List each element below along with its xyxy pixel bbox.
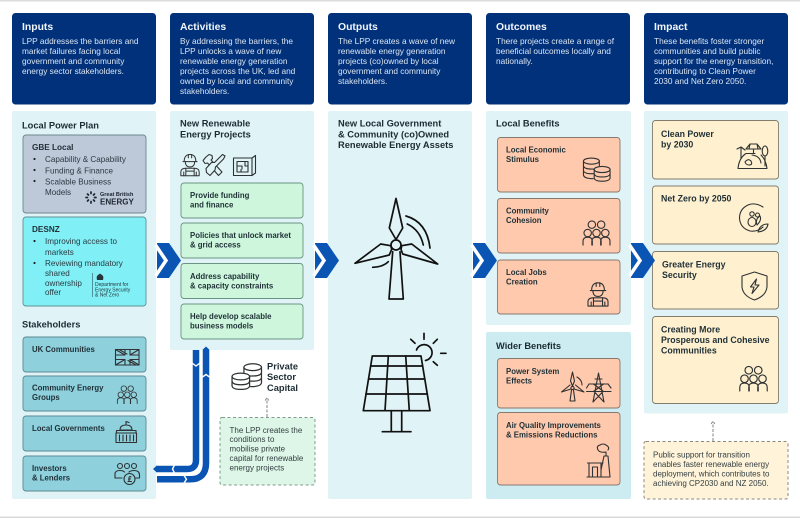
card: UK Communities (23, 337, 146, 372)
card: Greater Energy Security (652, 252, 778, 309)
card: Power System Effects: Power System (506, 367, 559, 376)
panel: activities (170, 111, 314, 350)
card: Community Energy Groups: Community Energy (32, 384, 104, 392)
header: Activities: stakeholders. (180, 86, 229, 96)
card: Local Governments (23, 416, 146, 451)
callout: public support: Public support for transition (653, 450, 750, 460)
header: Inputs: market failures facing local (22, 46, 120, 56)
card: Net Zero by 2050 (652, 186, 778, 244)
header: Outcomes: beneficial outcomes locally and (496, 46, 611, 56)
icon: spanner and screwdriver (203, 154, 225, 176)
header: Outcomes: nationally. (496, 56, 533, 66)
card: GBE Local: Models (45, 188, 71, 197)
card: UK Communities: UK Communities (32, 345, 95, 354)
header: Outputs: renewable energy generation (338, 46, 446, 56)
heading: New Renewable Energy Projects: Energy Projects (180, 130, 251, 140)
header: Outputs: government and community (338, 66, 441, 76)
card: Investors and Lenders: Investors (32, 464, 67, 473)
icon: solar panel with sun (363, 333, 446, 432)
arrow: outputs to outcomes (472, 243, 497, 278)
icon: investors with coin (115, 464, 140, 484)
card: Help develop scalable business models (181, 304, 303, 339)
label: Private Sector Capital (267, 362, 298, 393)
card: Local Jobs Creation: Creation (506, 278, 538, 286)
card: DESNZ: offer (45, 288, 61, 297)
card: GBE Local: Capability & Capability (45, 155, 127, 164)
card: DESNZ: Reviewing mandatory (45, 259, 124, 268)
header: Inputs (12, 13, 156, 104)
card: DESNZ: Improving access to (45, 237, 117, 246)
card: Local Governments: Local Governments (32, 424, 105, 433)
bottom rule (0, 516, 800, 518)
card: Clean Power by 2030: by 2030 (661, 140, 693, 150)
header: Inputs: energy sector stakeholders. (22, 66, 124, 76)
card: Net Zero by 2050: Net Zero by 2050 (661, 194, 732, 204)
logo: Great British Energy (86, 192, 134, 206)
arrow: inputs to activities (156, 243, 181, 278)
card: Address capability and capacity constraints (181, 264, 303, 298)
heading: New Local Government and Community (co)Owned Renewable Energy Assets: Renewable Energy Assets (338, 140, 453, 150)
card: Help develop scalable business models: business models (190, 322, 254, 330)
header: Impact: Impact (654, 22, 688, 33)
header: Outcomes: Outcomes (496, 22, 547, 33)
callout: mobilise private capital: energy projects (230, 464, 284, 472)
header: Outcomes (486, 13, 630, 104)
icon: power station with smoke (587, 444, 610, 477)
header: Outputs: stakeholders. (338, 76, 387, 86)
card: GBE Local: Funding & Finance (45, 166, 113, 176)
card: Creating More Prosperous and Cohesive Communities: Communities (661, 346, 717, 356)
card: Investors and Lenders: & Lenders (32, 474, 71, 482)
heading: Local Benefits: Local Benefits (496, 118, 560, 128)
logo: Department for Energy Security and Net Zero (92, 273, 131, 298)
card: Community Energy Groups (23, 376, 146, 411)
panel: local benefits (486, 111, 631, 325)
card: Greater Energy Security: Security (662, 270, 697, 280)
icon: government building (116, 422, 136, 442)
header: Impact: contributing to Clean Power (654, 66, 756, 76)
callout: mobilise private capital: conditions to (230, 435, 275, 444)
card: Local Economic Stimulus: Local Economic (506, 146, 566, 154)
header: Impact: These benefits foster stronger (654, 36, 764, 46)
card: Power System Effects: Effects (506, 376, 533, 386)
arrow: activities to outputs (314, 243, 339, 278)
card: Creating More Prosperous and Cohesive Communities: Creating More (661, 324, 720, 334)
heading: New Local Government and Community (co)Owned Renewable Energy Assets: New Local Government (338, 118, 441, 128)
panel: inputs (12, 111, 156, 499)
card: Provide funding and finance (181, 183, 303, 218)
heading: New Renewable Energy Projects: New Renewable (180, 118, 250, 128)
card: Local Jobs Creation: Local Jobs (506, 268, 547, 277)
icon: wind turbine (562, 372, 584, 401)
logo: Department for Energy Security and Net Zero: Department for (95, 282, 129, 288)
header: Outputs: Outputs (338, 22, 378, 33)
panel: impact (644, 111, 788, 414)
header: Activities: owned by local and community (180, 76, 294, 86)
card: Address capability and capacity constraints: & capacity constraints (190, 282, 274, 290)
header: Inputs: Inputs (22, 22, 53, 33)
label: Private Sector Capital: Private (267, 362, 298, 372)
icon: private capital coins (232, 364, 261, 389)
top rule (0, 0, 800, 2)
card: Investors and Lenders (23, 456, 146, 491)
card: Local Economic Stimulus: Stimulus (506, 155, 540, 164)
icon: worker (588, 283, 608, 306)
callout: public support: deployment, which contributes to (653, 470, 770, 478)
icon: energy shield (742, 272, 767, 300)
card: Creating More Prosperous and Cohesive Communities: Prosperous and Cohesive (661, 335, 770, 345)
header: Inputs: LPP addresses the barriers and (22, 36, 139, 46)
header: Activities: renewable energy generation (180, 56, 288, 66)
card: Policies that unlock market and grid access (181, 223, 303, 258)
card: Power System Effects (498, 358, 620, 408)
panel: outputs (328, 111, 472, 499)
card: DESNZ: shared (45, 269, 70, 278)
card: DESNZ: DESNZ (32, 225, 60, 234)
callout: mobilise private capital: mobilise private (230, 445, 286, 454)
header: Inputs: government and community (22, 56, 125, 66)
card: Clean Power by 2030: Clean Power (661, 129, 714, 139)
arrow: outcomes to impact (630, 243, 655, 278)
card: Air Quality Improvements and Emissions Reductions (498, 412, 620, 485)
card: Provide funding and finance: and finance (190, 200, 234, 210)
card: GBE Local: GBE Local (32, 143, 73, 152)
heading: Wider Benefits: Wider Benefits (496, 341, 561, 351)
card: Greater Energy Security: Greater Energy (662, 260, 726, 270)
icon: net zero circle with leaf (740, 204, 768, 232)
heading: New Local Government and Community (co)Owned Renewable Energy Assets (338, 118, 453, 150)
card: Community Energy Groups: Groups (32, 393, 60, 402)
panel: wider benefits (486, 332, 631, 499)
card: DESNZ: markets (45, 248, 74, 257)
header: Impact: 2030 and Net Zero 2050. (654, 76, 746, 86)
heading: New Renewable Energy Projects (180, 118, 251, 140)
card: Local Jobs Creation (498, 260, 620, 314)
card: Policies that unlock market and grid access: & grid access (190, 240, 241, 250)
callout: public support (644, 442, 788, 499)
card: Local Economic Stimulus (498, 138, 620, 192)
callout: mobilise private capital: capital for renewable (230, 454, 304, 463)
icon: community (740, 366, 767, 391)
card: Community Cohesion: Community (506, 206, 550, 216)
callout: public support: enables faster renewable energy (653, 460, 769, 469)
card: Provide funding and finance: Provide funding (190, 191, 250, 200)
callout: mobilise private capital (220, 418, 315, 485)
icon: construction worker (181, 154, 199, 176)
card: Community Cohesion (498, 198, 620, 253)
header: Impact: support for the energy transition, (654, 56, 773, 66)
label: Private Sector Capital: Capital (267, 383, 298, 393)
card: Creating More Prosperous and Cohesive Communities (652, 316, 778, 404)
icon: clean power landscape (737, 144, 768, 168)
callout: mobilise private capital: The LPP creates the (230, 426, 303, 435)
header: Outputs: projects (co)owned by local (338, 56, 439, 66)
header: Impact: communities and build public (654, 46, 761, 56)
icon: wind turbine (355, 198, 438, 299)
card: Air Quality Improvements and Emissions Reductions: & Emissions Reductions (506, 430, 598, 440)
card: DESNZ: ownership (45, 279, 82, 288)
logo: Department for Energy Security and Net Zero: & Net Zero (95, 292, 119, 298)
icon: union flag (116, 350, 139, 365)
logo: Department for Energy Security and Net Zero: Energy Security (95, 287, 131, 293)
card: Air Quality Improvements and Emissions Reductions: Air Quality Improvements (506, 421, 602, 430)
header: Impact (644, 13, 788, 104)
label: Private Sector Capital: Sector (267, 372, 296, 382)
header: Activities: LPP unlocks a wave of new (180, 46, 282, 56)
header: Outcomes: There projects create a range of (496, 36, 615, 46)
icon: community group (117, 386, 137, 404)
heading: New Local Government and Community (co)Owned Renewable Energy Assets: & Community (co)Owned (338, 130, 449, 140)
card: Clean Power by 2030 (652, 120, 778, 179)
logo: Great British Energy: Great British (100, 192, 134, 198)
logo: Great British Energy: ENERGY (100, 198, 134, 206)
header: Outputs: The LPP creates a wave of new (338, 36, 456, 46)
card: Policies that unlock market and grid access: Policies that unlock market (190, 231, 291, 240)
header: Activities: By addressing the barriers, the (180, 36, 293, 46)
card: Help develop scalable business models: Help develop scalable (190, 312, 272, 321)
icon: people (583, 221, 610, 245)
heading: Stakeholders: Stakeholders (22, 320, 80, 330)
header: Activities: Activities (180, 22, 226, 33)
header: Activities (170, 13, 314, 104)
card: GBE Local (23, 135, 146, 213)
icon: blueprint (234, 156, 256, 176)
icon: electricity pylon (586, 373, 611, 402)
icon: coins (583, 158, 610, 181)
arrow: dashed link to impact (711, 421, 715, 441)
header: Activities: projects across the UK, led and (180, 66, 296, 76)
card: Community Cohesion: Cohesion (506, 216, 542, 225)
card: GBE Local: Scalable Business (45, 178, 111, 186)
callout: public support: achieving CP2030 and NZ 2050. (653, 479, 769, 488)
card: DESNZ (23, 217, 146, 306)
header: Outputs (328, 13, 472, 104)
arrow: dashed link to private capital (265, 398, 269, 417)
arrow: capital flow pipes (153, 346, 210, 483)
heading: Local Power Plan: Local Power Plan (22, 120, 99, 130)
card: Address capability and capacity constraints: Address capability (190, 272, 260, 281)
